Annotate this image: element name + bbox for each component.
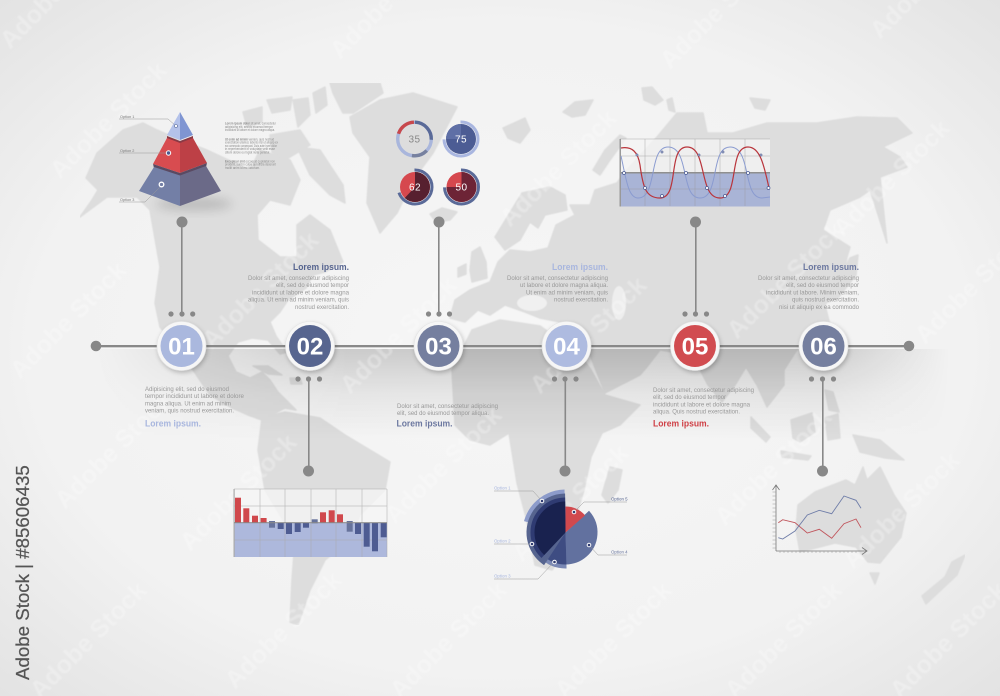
node 02 <box>286 322 334 370</box>
text block 04: ut labore et dolore magna aliqua. <box>520 283 608 289</box>
pie chart: Option 3 <box>494 574 511 578</box>
pyramid side notes: Lorem ipsum dolor sit amet, consectetur <box>225 122 277 126</box>
node 02: 02 <box>297 334 323 360</box>
text block 02: elit, sed do eiusmod tempor <box>276 283 349 289</box>
text block 01: magna aliqua. Ut enim ad minim <box>145 401 231 407</box>
watermark text: Adobe Stock <box>379 401 507 529</box>
node 04: 04 <box>553 334 580 360</box>
red wave <box>621 147 769 198</box>
connector 06 <box>809 376 836 476</box>
pyramid side notes: proident, sunt in culpa qui officia deserunt <box>225 163 276 167</box>
blue bars <box>269 519 387 551</box>
text block 04: Ut enim ad minim veniam, quis <box>526 290 608 296</box>
node 04 <box>542 322 591 370</box>
text block 03 <box>396 404 498 430</box>
donut 35: 35 <box>408 134 421 146</box>
text block 01: Lorem ipsum. <box>145 418 201 430</box>
text block 03: Lorem ipsum. <box>396 418 452 430</box>
connector 04 <box>552 376 579 476</box>
data points <box>622 151 770 198</box>
node 06: 06 <box>810 334 837 360</box>
watermark text: Adobe Stock <box>524 271 652 399</box>
text block 06: quis nostrud exercitation. <box>792 298 859 304</box>
watermark text: Adobe Stock <box>4 256 132 384</box>
wave chart <box>620 139 770 206</box>
pyramid side notes: exercitation ullamco laboris nisi ut aliquip ex <box>225 141 278 145</box>
text block 04: nostrud exercitation. <box>554 298 608 304</box>
text block 05 <box>653 388 754 430</box>
connector 03 <box>426 216 452 317</box>
watermark text: Adobe Stock <box>196 226 324 354</box>
line chart <box>772 485 867 554</box>
text block 06: Dolor sit amet, consectetur adipiscing <box>758 276 859 282</box>
pyramid side notes: mollit anim id est laborum. <box>225 166 260 170</box>
watermark text: Adobe Stock <box>506 439 634 567</box>
node 03: 03 <box>425 334 452 360</box>
text block 01: tempor incididunt ut labore et dolore <box>145 394 245 400</box>
pie labels <box>494 491 627 579</box>
watermark text: Adobe Stock <box>827 114 955 242</box>
text block 03: Dolor sit amet, consectetur adipiscing <box>397 404 498 410</box>
donut 62: 62 <box>409 182 421 194</box>
text block 02: incididunt ut labore et dolore magna <box>252 290 350 296</box>
text block 02: nostrud exercitation. <box>295 305 349 311</box>
donut 50: 50 <box>455 182 468 194</box>
text block 05: aliqua. Quis nostrud exercitation. <box>653 410 740 416</box>
blue wave <box>621 147 770 198</box>
pyramid side notes: incididunt ut labore et dolore magna aliqua. <box>225 128 275 132</box>
text block 06: incididunt ut labore. Minim veniam, <box>766 290 859 296</box>
blue series <box>778 496 861 539</box>
node 03 <box>414 322 463 370</box>
node 01: 01 <box>168 334 195 360</box>
text block 02: aliqua. Ut enim ad minim veniam, quis <box>248 298 349 304</box>
pyramid chart: Option 2 <box>120 149 134 153</box>
world map <box>80 83 965 625</box>
watermark text: Adobe Stock <box>709 403 837 531</box>
watermark text: Adobe Stock <box>334 271 462 399</box>
text block 01: Adipisicing elit, sed do eiusmod <box>145 387 229 393</box>
text block 01 <box>145 387 245 430</box>
text block 06: Lorem ipsum. <box>803 262 859 273</box>
watermark text: Adobe Stock <box>49 386 177 514</box>
text block 04 <box>507 262 608 304</box>
pyramid side notes: adipisicing elit, sed do eiusmod tempor <box>225 125 274 129</box>
pyramid chart: Option 1 <box>120 115 134 119</box>
text block 05: Dolor sit amet, consectetur adipiscing <box>653 388 754 394</box>
text block 06: elit, sed do eiusmod tempor <box>786 283 859 289</box>
pyramid side notes: ea commodo consequat. Duis aute irure dolor <box>225 144 278 148</box>
text block 05: Lorem ipsum. <box>653 418 709 430</box>
watermark text: Adobe Stock <box>494 104 622 232</box>
pyramid side notes <box>225 122 278 170</box>
text block 05: incididunt ut labore et dolore magna <box>653 402 751 408</box>
watermark text: Adobe Stock <box>219 566 347 694</box>
pyramid chart: Option 3 <box>120 198 134 202</box>
donut 75: 75 <box>455 134 467 146</box>
pyramid side notes: cillum dolore eu fugiat nulla pariatur. <box>225 150 270 154</box>
option labels <box>119 119 176 202</box>
pie chart: Option 5 <box>611 496 628 502</box>
watermark text: Adobe Stock <box>721 216 849 344</box>
watermark text: Adobe Stock <box>174 428 302 556</box>
pie chart <box>494 486 628 579</box>
text block 02 <box>248 262 350 311</box>
text block 03: elit, sed do eiusmod tempor aliqua. <box>397 411 489 417</box>
node 05: 05 <box>682 334 708 360</box>
red series <box>778 519 861 538</box>
text block 02: Dolor sit amet, consectetur adipiscing <box>248 276 349 282</box>
node 06 <box>799 322 848 370</box>
connector 05 <box>682 216 709 317</box>
node 05 <box>670 322 720 370</box>
pyramid side notes: Excepteur sint occaecat cupidatat non <box>225 160 275 164</box>
pyramid side notes: in reprehenderit in voluptate velit esse <box>225 147 275 151</box>
text block 04: Lorem ipsum. <box>552 262 608 273</box>
node 01 <box>157 322 206 370</box>
pyramid chart <box>119 112 232 211</box>
text block 06: nisi ut aliquip ex ea commodo <box>779 305 860 311</box>
donut charts <box>391 115 478 204</box>
pie chart: Option 1 <box>494 486 511 490</box>
connector 01 <box>168 216 195 317</box>
pie chart: Option 4 <box>611 550 628 554</box>
red bars <box>235 498 343 523</box>
pie chart: Option 2 <box>494 538 511 544</box>
text block 04: Dolor sit amet, consectetur adipiscing <box>507 276 608 282</box>
watermark text: Adobe Stock <box>44 56 172 184</box>
stock id side label: Adobe Stock | #85606435 <box>12 465 33 680</box>
text block 01: veniam, quis nostrud exercitation. <box>145 409 234 415</box>
timeline shadow <box>141 349 924 414</box>
text block 02: Lorem ipsum. <box>293 262 349 273</box>
timeline axis <box>91 341 914 351</box>
watermark text: Adobe Stock <box>837 446 965 574</box>
pyramid side notes: Ut enim ad minim veniam, quis nostrud <box>225 138 274 142</box>
text block 05: elit, sed do eiusmod tempor <box>653 395 726 401</box>
text block 06 <box>758 262 860 311</box>
bar chart <box>234 489 387 557</box>
connector 02 <box>295 376 322 476</box>
axes <box>772 485 867 554</box>
